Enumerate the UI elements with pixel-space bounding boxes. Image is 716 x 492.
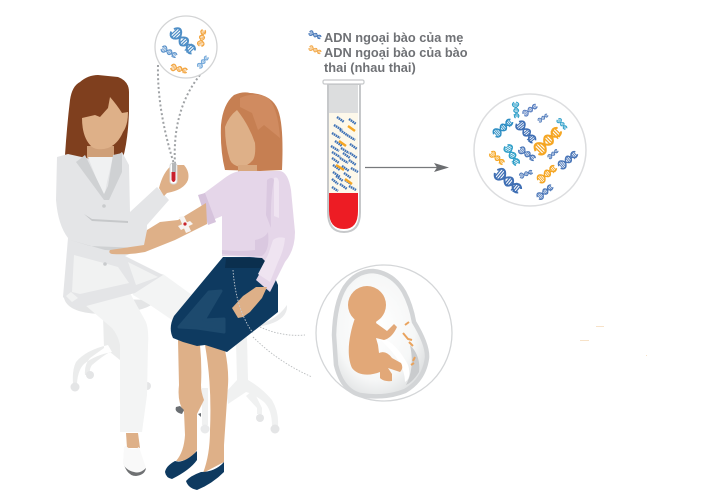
legend — [308, 30, 468, 75]
patient arm — [109, 203, 207, 254]
legend text: fetal: ADN ngoại bào của bào — [324, 45, 468, 60]
sweater — [198, 171, 295, 292]
fetus circle — [316, 265, 452, 401]
small test tube in hand — [170, 163, 177, 184]
doctor coat — [56, 152, 169, 309]
patient legs — [176, 340, 228, 473]
cell-free DNA fragments in tube — [331, 117, 358, 191]
shoe right — [186, 462, 224, 490]
doctor shoe — [123, 446, 146, 476]
legend text: maternal: ADN ngoại bào của mẹ — [324, 30, 463, 45]
womb — [334, 271, 427, 396]
legend text: fetal continued: thai (nhau thai) — [324, 60, 416, 75]
large test tube — [323, 80, 364, 232]
legend icon: maternal DNA — [308, 30, 322, 40]
shoe left — [165, 451, 197, 479]
dotted lines to fetus — [253, 327, 312, 377]
doctor — [56, 75, 192, 476]
doctor face — [82, 97, 128, 149]
patient face — [225, 110, 255, 167]
dotted lines to DNA circle — [158, 65, 200, 164]
fetal DNA fragments — [403, 322, 415, 365]
patient — [109, 92, 295, 490]
large DNA circle — [474, 94, 586, 206]
fetus — [348, 286, 402, 381]
sleeve — [199, 180, 222, 222]
skirt — [171, 257, 278, 352]
doctor hand holding tube — [159, 165, 188, 196]
zoom circle: DNA in blood — [155, 16, 217, 78]
doctor trousers — [85, 272, 192, 432]
dotted line on skirt — [233, 270, 253, 333]
patient neck — [238, 165, 257, 172]
patient hair — [221, 92, 282, 171]
patient hand — [232, 287, 267, 318]
doctor hair — [65, 75, 129, 160]
faint specks — [580, 326, 647, 356]
stool: patient — [200, 305, 287, 434]
legend icon: fetal DNA — [308, 45, 322, 55]
stool: doctor — [64, 298, 156, 392]
bandage — [178, 216, 193, 233]
arrow — [365, 163, 449, 172]
doctor neck — [87, 146, 114, 158]
doctor ankle — [126, 433, 140, 448]
back shoe — [176, 406, 201, 417]
